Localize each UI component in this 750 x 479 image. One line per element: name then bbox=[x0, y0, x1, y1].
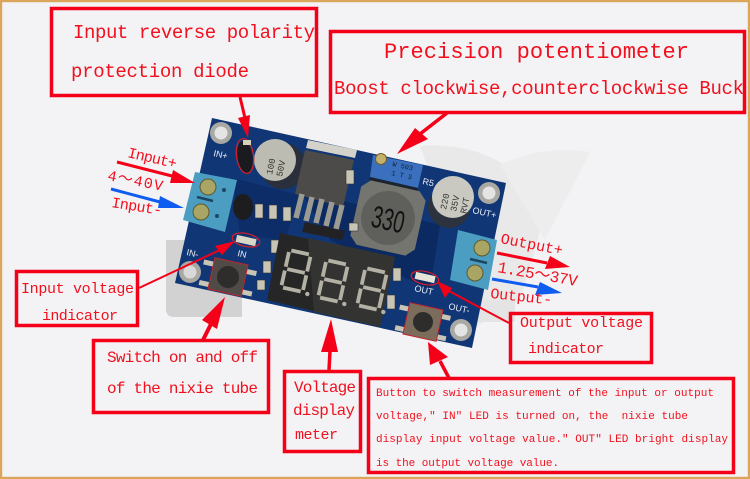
arrow: output minus bbox=[492, 279, 562, 295]
output capacitor bbox=[428, 176, 474, 228]
left screw terminal bbox=[183, 172, 237, 232]
digit 2 bbox=[317, 260, 355, 307]
output capacitor: RVT bbox=[459, 196, 472, 215]
inductor 330: 330 bbox=[368, 199, 408, 240]
arrow: output plus bbox=[497, 253, 570, 269]
callout: switch on and off: Switch on and off bbox=[107, 349, 258, 367]
callout: precision potentiometer bbox=[330, 32, 744, 112]
silkscreen labels bbox=[186, 148, 497, 316]
silkscreen labels: IN bbox=[237, 248, 248, 260]
arrow: voltage display callout bbox=[321, 319, 338, 370]
callout: output voltage indicator: Output voltage bbox=[520, 315, 643, 332]
arrow: input plus bbox=[117, 162, 195, 183]
callout: measurement button description: is the output voltage value. bbox=[376, 458, 559, 470]
callout: input voltage indicator: Input voltage bbox=[21, 281, 134, 298]
callout: measurement button description: display input voltage value." OUT" LED bright display bbox=[376, 434, 728, 446]
arrow: input voltage indicator bbox=[139, 241, 235, 288]
callout: measurement button description bbox=[368, 378, 734, 472]
input capacitor: 50V bbox=[275, 159, 288, 178]
callout: voltage display meter: display bbox=[293, 402, 355, 420]
label: output minus: Output- bbox=[489, 286, 553, 309]
label: output voltage range: 1.25～37V bbox=[496, 259, 579, 291]
arrow: output voltage indicator bbox=[437, 281, 509, 323]
input capacitor: 100 bbox=[265, 158, 278, 176]
callout: output voltage indicator bbox=[510, 314, 652, 362]
silkscreen labels: IN+ bbox=[213, 148, 229, 161]
label: output plus: Output+ bbox=[499, 231, 564, 260]
digit 3 bbox=[356, 268, 394, 315]
right screw terminal bbox=[450, 230, 497, 290]
arrow: button callout bbox=[428, 342, 449, 378]
digit 1 bbox=[280, 250, 318, 297]
watermark logo shapes bbox=[166, 146, 590, 330]
arrow: diode callout bbox=[238, 97, 250, 138]
callout: precision potentiometer: Boost clockwise,counterclockwise Buck bbox=[334, 78, 744, 100]
potentiometer bbox=[369, 154, 423, 193]
callout: input voltage indicator bbox=[16, 272, 138, 326]
callout: measurement button description: voltage," IN" LED is turned on, the nixie tube bbox=[376, 411, 688, 423]
regulator chip bbox=[295, 140, 357, 229]
seven segment display bbox=[267, 233, 395, 327]
potentiometer: W 503 bbox=[391, 161, 414, 173]
callout: precision potentiometer: Precision potentiometer bbox=[384, 40, 689, 65]
label: input minus: Input- bbox=[110, 195, 163, 220]
right push button bbox=[394, 301, 452, 343]
callout: output voltage indicator: indicator bbox=[528, 341, 604, 358]
callout: measurement button description: Button to switch measurement of the input or output bbox=[376, 388, 714, 400]
callout: voltage display meter: meter bbox=[295, 427, 338, 444]
label: input voltage range: 4～40V bbox=[106, 168, 164, 196]
input capacitor bbox=[254, 139, 306, 189]
transistor and small parts bbox=[233, 170, 401, 309]
mounting holes bbox=[179, 122, 500, 341]
output capacitor: 220 bbox=[439, 193, 452, 211]
inductor 330 bbox=[349, 179, 427, 257]
left push button bbox=[198, 256, 258, 298]
callout: voltage display meter: Voltage bbox=[294, 379, 356, 397]
label: input plus: Input+ bbox=[126, 145, 178, 173]
silkscreen labels: IN- bbox=[186, 247, 199, 260]
circuit board module bbox=[175, 118, 506, 348]
callout: switch on and off bbox=[94, 340, 268, 412]
silkscreen labels: OUT bbox=[414, 283, 435, 297]
arrow: input minus bbox=[111, 189, 184, 208]
callout: input reverse polarity diode: protection diode bbox=[71, 61, 249, 83]
callout: switch on and off: of the nixie tube bbox=[107, 380, 258, 398]
input LED with red ring bbox=[231, 231, 261, 249]
silkscreen labels: OUT- bbox=[448, 301, 471, 316]
callout: input reverse polarity diode bbox=[52, 8, 316, 96]
diode D1 with red ring bbox=[234, 137, 256, 175]
callout: input voltage indicator: indicator bbox=[42, 308, 118, 325]
callout: input reverse polarity diode: Input reverse polarity bbox=[73, 22, 315, 44]
output capacitor: 35V bbox=[449, 194, 462, 213]
silkscreen labels: OUT+ bbox=[472, 205, 497, 220]
arrow: potentiometer callout bbox=[397, 113, 447, 154]
potentiometer: 1 T 3 bbox=[390, 170, 413, 182]
output LED with red ring bbox=[410, 269, 440, 287]
board pcb bbox=[175, 118, 506, 348]
silkscreen labels: R5 bbox=[422, 176, 435, 188]
callout: voltage display meter bbox=[284, 372, 360, 452]
arrow: switch callout bbox=[202, 297, 225, 340]
